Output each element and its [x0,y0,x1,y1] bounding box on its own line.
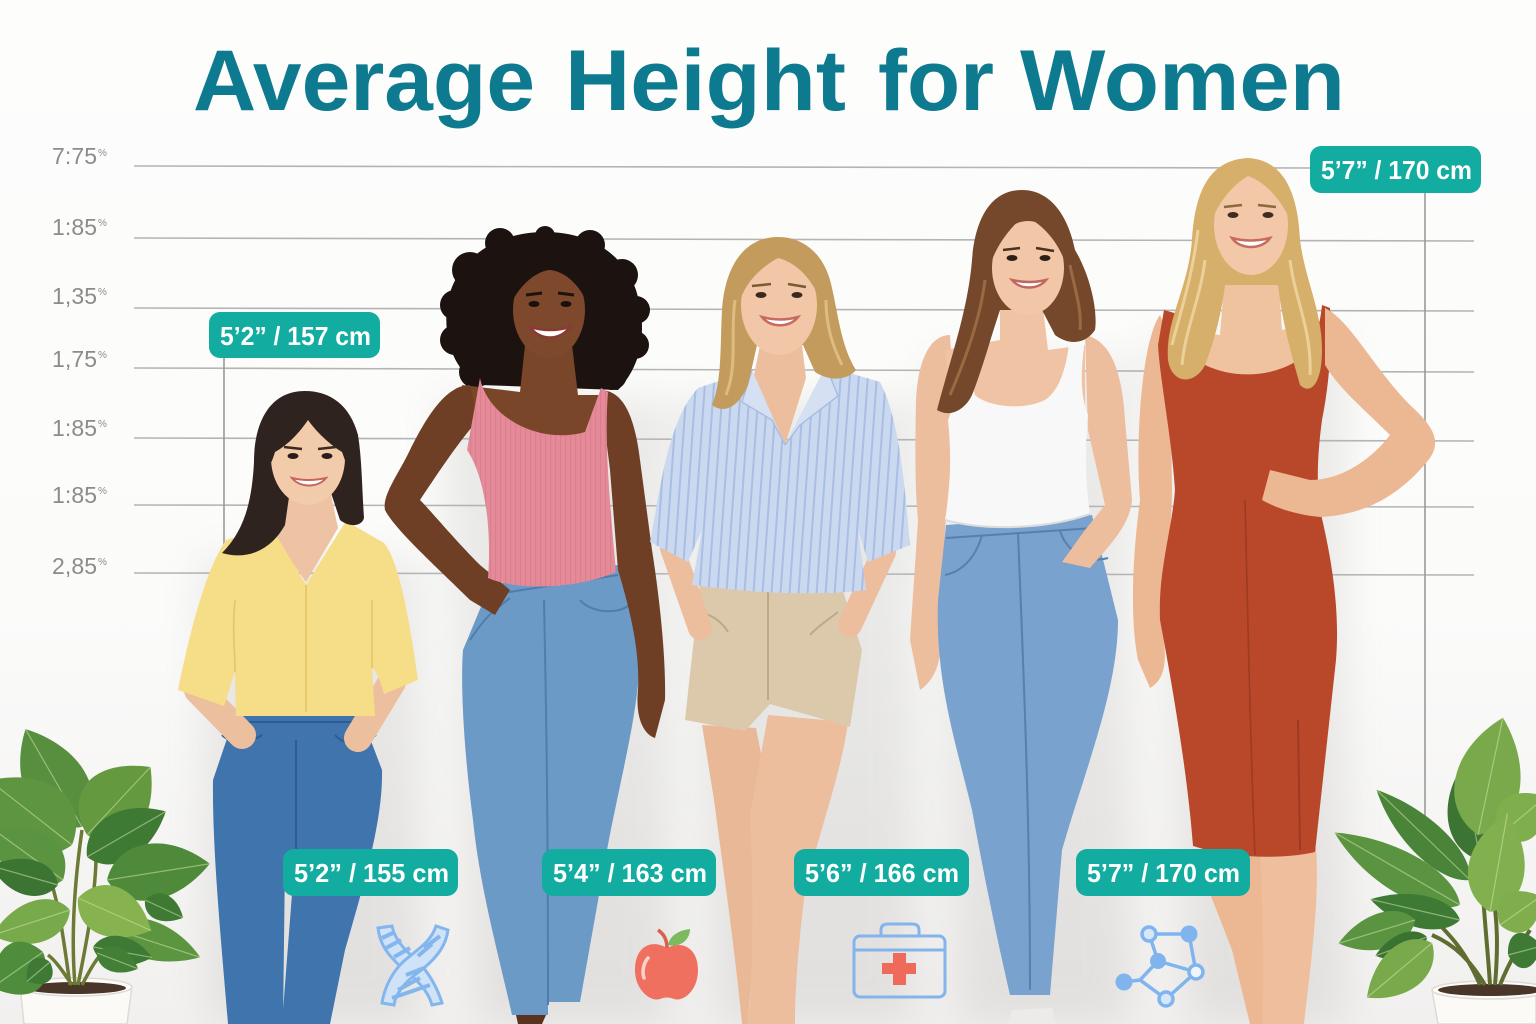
pot [20,978,132,1024]
torso skin [462,345,612,445]
face [741,255,817,355]
hair [222,391,364,555]
face [1214,175,1288,275]
neck [752,345,806,445]
woman 4: white tank top and jeans [910,190,1132,1024]
blouse [178,521,418,716]
facial features [752,284,806,325]
scale labels: 1:85 [52,482,97,508]
hairline [1212,166,1290,220]
icon: molecule network [1116,926,1203,1006]
height label: top right: 5’7” / 170 cm [1321,155,1472,185]
facial features [526,293,574,338]
arms [672,548,884,628]
shorts [685,583,862,731]
scale labels: % [98,148,107,159]
tank top [945,332,1090,527]
right arm [600,390,665,738]
left arm [385,385,510,615]
jeans [213,712,382,1024]
scale labels [52,143,107,579]
hair [712,237,856,409]
hairline [990,208,1066,265]
woman 1: yellow blouse and jeans [178,391,418,1024]
leaves [0,714,214,1010]
wall shadows behind figures [200,340,1345,1024]
scale labels: % [98,350,107,361]
face [513,262,585,358]
scale labels: 7:75 [52,143,97,169]
height label: woman 1: 5’2” / 155 cm [294,858,449,888]
jeans [938,515,1118,995]
height label: woman 4 [1076,849,1250,896]
height label: woman 2: 5’4” / 163 cm [553,858,707,888]
left arm [910,335,955,690]
arms [198,682,392,738]
grid lines [134,166,1474,870]
scale labels: % [98,287,107,298]
woman 3: striped shirt and beige shorts [650,237,910,1024]
scale labels: % [98,218,107,229]
facial features [1224,205,1276,247]
height label: woman 3: 5’6” / 166 cm [805,858,959,888]
facial features [284,447,336,486]
face [992,221,1064,315]
jeans [462,565,640,1015]
height label: top left: 5’2” / 157 cm [220,321,371,351]
hair [937,190,1096,413]
scale labels: % [98,419,107,430]
torso skin [945,300,1085,410]
left arm [1133,315,1172,688]
feet [516,1015,546,1024]
afro hair [440,226,650,390]
hair [1168,158,1322,389]
right arm with hand on pocket [1062,335,1132,568]
height label: woman 1 [283,849,458,896]
facial features [1003,248,1054,288]
plant: right [1324,711,1536,1024]
legs [702,725,770,1024]
hair line [510,258,588,305]
title: Height [565,33,846,129]
scale labels: 1,35 [52,283,97,309]
title: Women [1020,33,1345,129]
scale labels: % [98,486,107,497]
woman 2: pink tank top and jeans [385,226,665,1024]
pot [1432,981,1536,1024]
height scale grid [52,143,1474,870]
height label: woman 2 [542,849,716,896]
white shoe [1008,1008,1056,1024]
right arm with hand on hip [1262,308,1435,517]
scale labels: 1:85 [52,214,97,240]
leaves [1324,711,1536,1015]
title [193,33,1345,129]
scale labels: 1:85 [52,415,97,441]
stems [48,830,105,985]
tank top [467,378,616,587]
dress [1158,305,1337,857]
stems [1430,840,1530,985]
title: Average [193,33,535,129]
neck [270,490,338,582]
woman 5: red dress [1133,158,1435,1024]
icon: DNA helix [378,926,448,1005]
legs [1193,850,1272,1024]
hair front [265,396,350,466]
plant: left [0,714,214,1024]
scale labels: 2,85 [52,553,97,579]
icon: first aid kit [854,924,945,997]
height label: top right [1310,146,1481,193]
face [271,411,345,505]
height label: top left [209,312,380,358]
chest [1170,270,1325,375]
icon: apple [635,929,698,999]
shirt [650,366,910,593]
scale labels: 1,75 [52,346,97,372]
height label: woman 3 [794,849,969,896]
hairline [740,248,820,300]
scale labels: % [98,557,107,568]
title: for [878,33,994,129]
height label: woman 4: 5’7” / 170 cm [1087,858,1240,888]
